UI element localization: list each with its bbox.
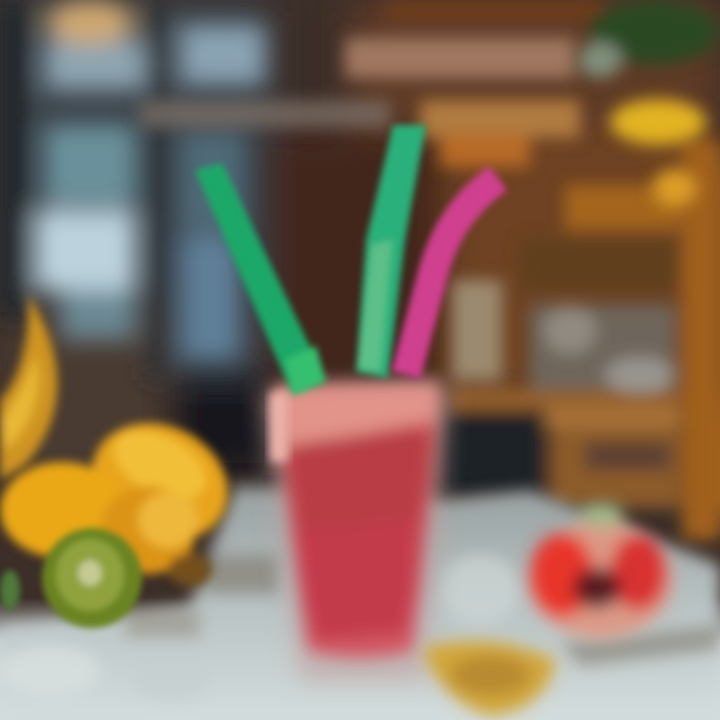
pink straw [406, 178, 498, 375]
wooden shelves [140, 0, 720, 540]
glass of red smoothie [262, 382, 448, 680]
lemon slice on table [422, 641, 556, 716]
window panes [0, 0, 265, 380]
yellow fruit and leaves on the shelf [578, 0, 720, 207]
green straw left [195, 163, 326, 396]
table [0, 485, 720, 720]
green straw middle [356, 125, 426, 378]
fruit: banana [0, 295, 57, 480]
fruit: kiwi slice [0, 528, 142, 628]
fruit: lemon wedges [0, 402, 247, 586]
fruit: red tomato half [528, 503, 672, 638]
